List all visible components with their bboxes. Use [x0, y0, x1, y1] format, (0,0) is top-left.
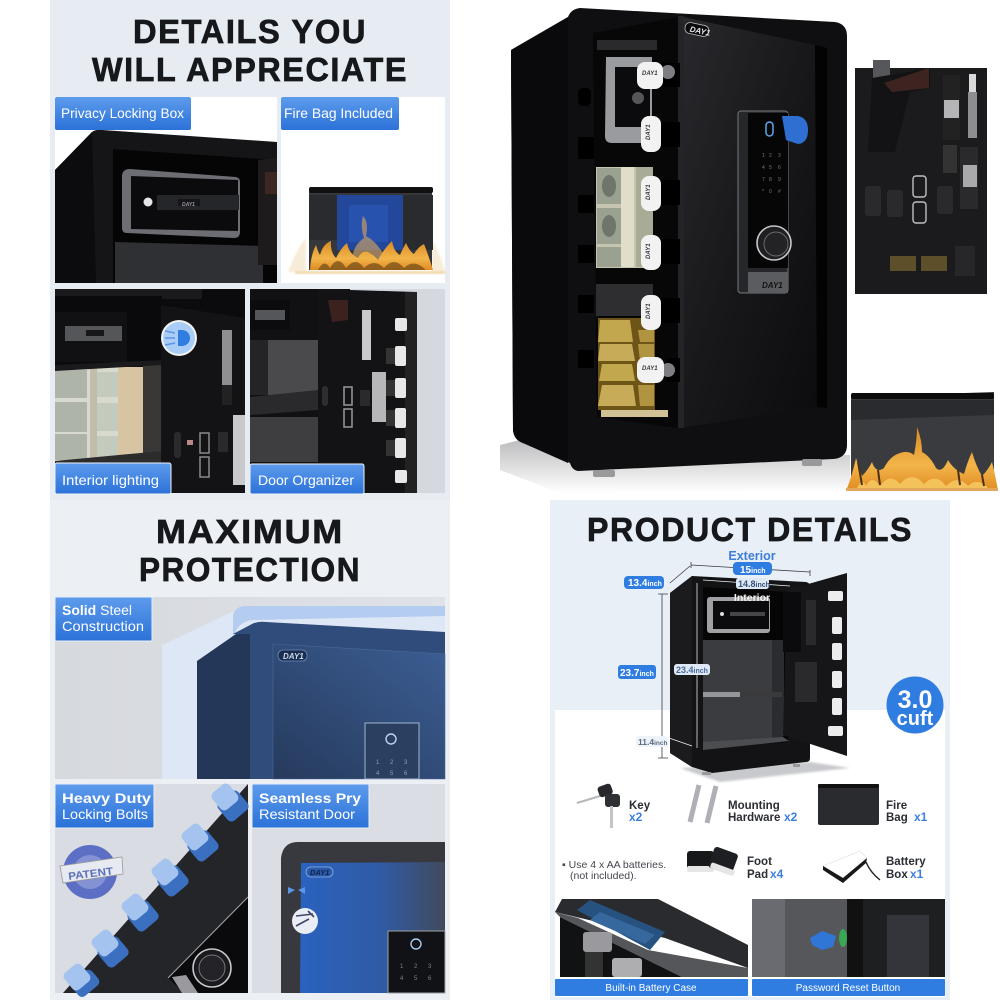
- dimension: exterior width: Exterior: [728, 549, 776, 563]
- label: seamless pry resistant door: Seamless Pry: [259, 790, 361, 806]
- item: foot pad: Pad: [747, 869, 768, 881]
- badge: 3.0 cuft: [886, 676, 944, 734]
- label: heavy duty locking bolts: Locking Bolts: [62, 806, 148, 822]
- item: foot pad: x4: [770, 867, 784, 881]
- keypad lock: [738, 111, 791, 293]
- item: mounting hardware: Mounting: [728, 800, 780, 812]
- lock bolts: DAY1: [646, 124, 652, 140]
- lock bolts: DAY1: [646, 303, 652, 319]
- keypad lock: #: [778, 189, 781, 195]
- label: privacy locking box: [55, 97, 191, 130]
- label: built-in battery case: [555, 979, 748, 996]
- label: interior lighting: Interior lighting: [62, 472, 159, 488]
- badge: 3.0 cuft: cuft: [897, 708, 934, 730]
- item: battery box: Box: [886, 869, 908, 881]
- keypad lock: DAY1: [762, 281, 783, 290]
- dimension: exterior width: 15inch: [740, 565, 766, 576]
- open safe with dimensions: [618, 549, 850, 782]
- label: solid steel construction: [55, 597, 152, 641]
- photo: privacy locking box: DAY1: [182, 202, 195, 208]
- keypad lock: 6: [778, 165, 781, 171]
- lock bolts: [578, 62, 680, 383]
- heading: maximum protection: [139, 513, 361, 588]
- heading: product details: PRODUCT DETAILS: [587, 511, 913, 548]
- heading: details you will appreciate: DETAILS YOU: [133, 13, 367, 50]
- keypad lock: 0: [769, 189, 772, 195]
- label: password reset button: [752, 979, 945, 996]
- heading: maximum protection: PROTECTION: [139, 551, 361, 588]
- photo: seamless pry resistant door: DAY1: [310, 868, 329, 877]
- dimension: interior depth: 11.4inch: [638, 737, 667, 747]
- patent stamp: PATENT: [68, 865, 114, 883]
- photo: solid steel safe: 1: [376, 760, 380, 766]
- photo: seamless pry resistant door: 1: [400, 964, 404, 970]
- label: door organizer: [250, 464, 364, 494]
- keypad lock: 5: [769, 165, 772, 171]
- panel: safe product hero: [500, 0, 1000, 500]
- dimension: exterior width: [728, 549, 776, 576]
- photo: solid steel safe: 4: [376, 771, 380, 777]
- label: password reset button: Password Reset Button: [796, 983, 900, 994]
- photo: built-in battery case: [555, 899, 748, 977]
- keypad lock: 2: [769, 153, 772, 159]
- item: key: x2: [629, 810, 643, 824]
- dimension lines: [658, 562, 810, 758]
- photo: door organizer: [250, 289, 445, 493]
- item: mounting hardware: x2: [784, 810, 798, 824]
- photo: seamless pry resistant door: 4: [400, 976, 404, 982]
- item: mounting hardware: Hardware: [728, 812, 780, 824]
- patent stamp: [60, 845, 123, 899]
- heading: maximum protection: MAXIMUM: [156, 513, 344, 550]
- lock bolts: DAY1: [646, 184, 652, 200]
- panel: product details: [550, 500, 950, 1000]
- label: fire bag included: [281, 97, 399, 130]
- photo: seamless pry resistant door: 5: [414, 976, 418, 982]
- photo: seamless pry resistant door: 6: [428, 976, 432, 982]
- door: [678, 16, 827, 428]
- photo: solid steel safe: 5: [390, 771, 394, 777]
- photo: seamless pry resistant door: [252, 784, 445, 993]
- dimension: interior width: Interior: [734, 592, 770, 604]
- keypad lock: 7: [762, 177, 765, 183]
- bolts: [62, 782, 251, 999]
- photo: solid steel safe: DAY1: [283, 652, 304, 661]
- photo: heavy duty locking bolts: [55, 782, 251, 999]
- label: heavy duty locking bolts: [55, 784, 154, 828]
- label: solid steel construction: Construction: [62, 618, 144, 634]
- lock bolts: DAY1: [646, 243, 652, 259]
- item: fire bag: Bag: [886, 812, 908, 824]
- door: DAY1: [689, 25, 712, 38]
- note: batteries: ▪ Use 4 x AA batteries.: [562, 859, 666, 871]
- door organizer panel: [855, 60, 987, 294]
- dimension: interior height: 23.4inch: [676, 665, 708, 675]
- keypad lock: 1: [762, 153, 765, 159]
- label: interior lighting: [55, 463, 171, 494]
- keypad lock: *: [762, 189, 764, 195]
- label: seamless pry resistant door: [252, 784, 369, 828]
- photo: seamless pry resistant door: 2: [414, 964, 418, 970]
- photo: solid steel safe: 6: [404, 771, 408, 777]
- item: foot pad: Foot: [747, 856, 772, 868]
- heading: details you will appreciate: [92, 13, 408, 88]
- label: door organizer: Door Organizer: [258, 472, 354, 488]
- item: battery box: Battery: [886, 856, 926, 868]
- interior: [593, 17, 678, 428]
- keypad lock: 9: [778, 177, 781, 183]
- panel: maximum protection: [50, 500, 450, 1000]
- label: seamless pry resistant door: Resistant Door: [259, 806, 355, 822]
- icon: hammer: [292, 908, 318, 934]
- keypad lock: 8: [769, 177, 772, 183]
- safe body: [511, 8, 847, 477]
- badge: 3.0 cuft: 3.0: [898, 686, 932, 714]
- lock bolts: DAY1: [642, 366, 658, 372]
- open door: [783, 573, 847, 756]
- safe body: [670, 576, 810, 775]
- photo: privacy locking box: [55, 97, 277, 283]
- lock bolts: DAY1: [642, 71, 658, 77]
- note: batteries: (not included).: [570, 870, 637, 882]
- item: key: Key: [629, 800, 651, 812]
- label: built-in battery case: Built-in Battery Case: [605, 983, 697, 994]
- keypad lock: 3: [778, 153, 781, 159]
- item: battery box: x1: [910, 867, 924, 881]
- fire bag with flames: [846, 392, 998, 491]
- photo: seamless pry resistant door: 3: [428, 964, 432, 970]
- item: fire bag: [818, 784, 928, 825]
- dimension: interior width: [734, 578, 770, 604]
- photo: fire bag: [281, 97, 445, 283]
- dimension: interior width: 14.8inch: [738, 579, 770, 589]
- item: mounting hardware: [690, 785, 798, 824]
- photo: solid steel safe: [55, 597, 445, 779]
- label: solid steel construction: Solid Steel: [62, 602, 132, 618]
- keypad lock: 4: [762, 165, 765, 171]
- photo: interior lighting: [55, 289, 245, 493]
- heading: details you will appreciate: WILL APPRECIATE: [92, 51, 408, 88]
- label: heavy duty locking bolts: Heavy Duty: [62, 790, 151, 806]
- dimension: exterior height: 23.7inch: [620, 668, 654, 679]
- photo: password reset button: [752, 899, 945, 977]
- icon: blue thumb on fingerprint: [782, 116, 808, 144]
- icon: interior light: [161, 320, 197, 356]
- label: privacy locking box: Privacy Locking Box: [61, 105, 184, 121]
- item: key: [577, 783, 651, 828]
- label: fire bag included: Fire Bag Included: [284, 105, 393, 121]
- dimension: exterior depth: 13.4inch: [628, 578, 662, 589]
- item: fire bag: x1: [914, 810, 928, 824]
- panel: details you will appreciate: [50, 0, 450, 500]
- item: battery box: [823, 851, 926, 883]
- photo: solid steel safe: 3: [404, 760, 408, 766]
- icon: pointing hand: [810, 931, 836, 950]
- item: foot pad: [687, 846, 784, 881]
- item: fire bag: Fire: [886, 800, 907, 812]
- photo: solid steel safe: 2: [390, 760, 394, 766]
